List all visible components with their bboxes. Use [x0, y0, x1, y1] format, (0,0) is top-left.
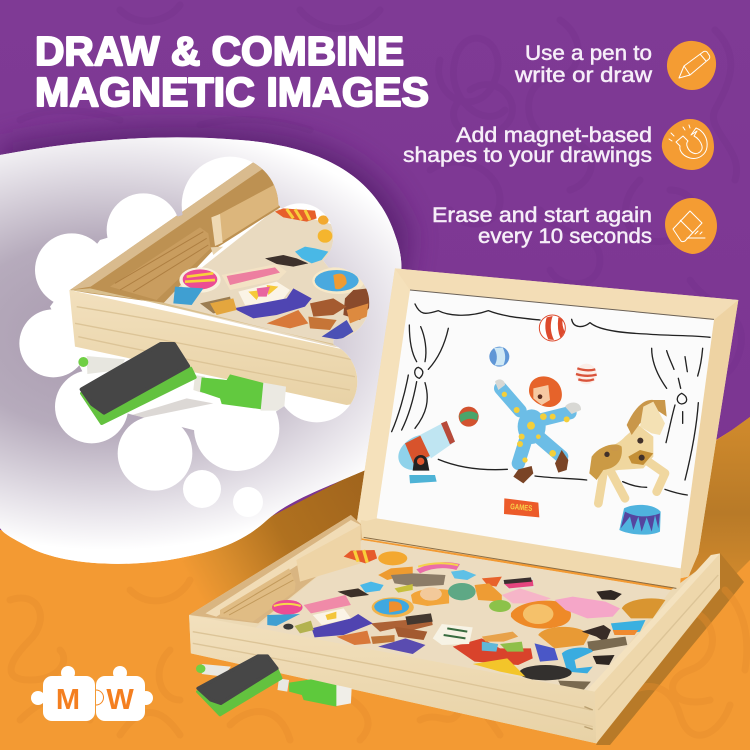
tray: open wooden box with magnets: [189, 515, 720, 743]
green ball: [459, 407, 479, 427]
right face of tray: [595, 553, 720, 743]
tray body backing: [189, 515, 720, 743]
orange floor: [0, 417, 750, 750]
feature text: erase: Erase and start again: [432, 204, 652, 227]
close-up of tray corner: [69, 160, 377, 423]
purple shadow around white blob: [0, 127, 410, 330]
big striped ball: [539, 315, 565, 341]
pen behind eraser: [202, 664, 231, 677]
front face of tray: [69, 290, 377, 405]
magnet: purple pieces: [233, 288, 312, 318]
clown: [495, 376, 581, 483]
eraser: [197, 670, 281, 715]
magnet: butterfly: [238, 282, 290, 305]
title: DRAW & COMBINE: [35, 28, 404, 74]
icon: magnet: [662, 119, 714, 170]
left inner wall: [189, 515, 362, 623]
horse: [589, 400, 667, 503]
feature text: pen: Use a pen to: [525, 42, 652, 65]
feature text: pen: [514, 42, 653, 87]
magnet: hot air balloon: [179, 267, 221, 293]
icon: eraser: [665, 198, 717, 254]
magnet: pink label: [222, 264, 287, 290]
wooden frame: [357, 268, 738, 578]
front face of tray: [189, 615, 596, 743]
feature text: erase: [432, 204, 652, 248]
title: [35, 28, 429, 115]
marker drawing: [392, 304, 710, 495]
feature text: magnets: [403, 124, 652, 167]
feature text: magnets: Add magnet-based: [456, 124, 652, 147]
panel: thought blob background: [0, 130, 420, 580]
pen behind eraser: [87, 356, 125, 374]
magnet: blue star and dark piece: [295, 247, 328, 263]
orange squiggle pattern: [10, 580, 747, 740]
cannon: [398, 421, 455, 483]
pen body: [193, 375, 205, 393]
feature text: magnets: shapes to your drawings: [403, 144, 652, 167]
cloud shape: [19, 157, 369, 491]
logo: MW puzzle badge: M: [56, 684, 80, 716]
logo: MW puzzle badge: [31, 666, 153, 721]
lower board frame: [361, 520, 681, 588]
thought bubble dots: [183, 470, 263, 517]
blue ball: [489, 347, 509, 367]
shadow on floor right of the product: [690, 417, 750, 600]
pedestal: [619, 505, 661, 535]
pen front: [277, 678, 289, 692]
magnets group: [267, 550, 665, 690]
icon: pencil: [667, 41, 716, 90]
feature text: pen: write or draw: [514, 64, 653, 87]
panel: thought cloud with close-up photo: [19, 157, 377, 491]
feature text: erase: every 10 seconds: [478, 225, 652, 248]
shadow under eraser: [132, 398, 213, 418]
board: upright magnetic whiteboard: [357, 268, 738, 578]
logo: MW puzzle badge: W: [106, 684, 134, 716]
eraser: [82, 368, 195, 423]
tray floor: [253, 540, 671, 695]
title: MAGNETIC IMAGES: [35, 69, 429, 115]
magnet: striped piece: [275, 208, 317, 222]
games tag: GAMES: [510, 502, 533, 513]
games tag: [504, 498, 539, 517]
red striped ball: [576, 364, 597, 384]
white surface: [377, 290, 714, 568]
purple squiggle pattern: [20, 5, 742, 400]
magnet: balloon: [312, 267, 364, 294]
shadow on floor left of the product: [180, 458, 385, 620]
